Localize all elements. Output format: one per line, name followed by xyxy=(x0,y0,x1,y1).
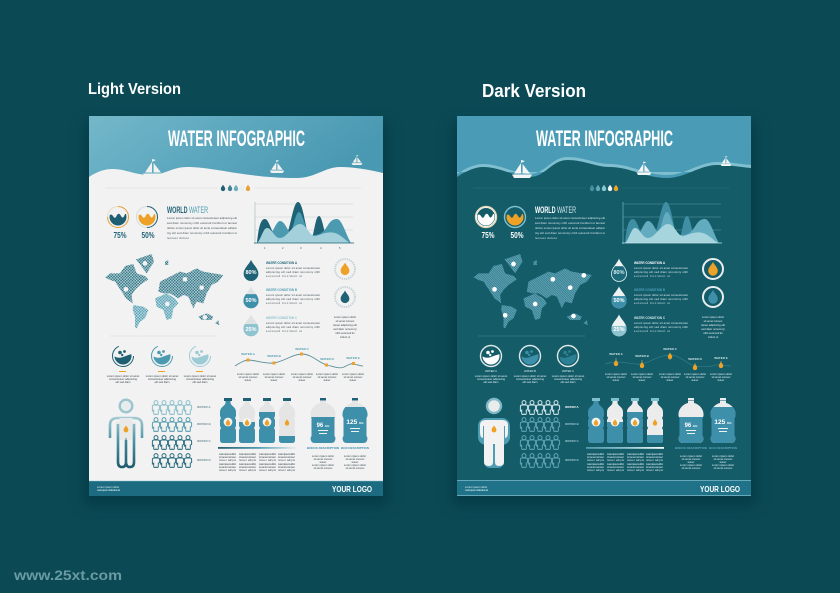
gauge caption: cidunt ut xyxy=(708,335,718,339)
water balls row: consectetuer adipiscing xyxy=(186,377,215,381)
line chart: tetuer xyxy=(271,378,278,382)
bottle notes: tetuer adipis xyxy=(607,458,625,462)
panel: light version poster xyxy=(84,116,388,506)
line chart: tetuer xyxy=(350,378,357,382)
water balls row: elit sed diam xyxy=(560,380,576,384)
bottle notes: sit amet consec xyxy=(627,455,645,459)
text block: world water: sed diam nonummy nibh euismod tincidunt ut laoreet xyxy=(167,221,237,225)
bottle notes xyxy=(219,452,296,472)
water condition C: Lorem ipsum dolor sit amet consectetuer xyxy=(634,321,688,325)
header band with wave xyxy=(457,116,751,200)
percent ring 50 xyxy=(136,206,158,240)
jug captions: tetuer xyxy=(720,460,727,464)
bottle notes: Lorem ipsum dolor xyxy=(239,462,256,466)
bottle notes: Lorem ipsum dolor xyxy=(239,452,256,456)
jug captions: sit amet consec xyxy=(314,466,333,470)
line chart: Lorem ipsum dolor xyxy=(316,372,338,376)
people pictogram rows: WATER D xyxy=(565,458,579,462)
water balls row: elit sed diam xyxy=(192,380,208,384)
line chart: tetuer xyxy=(692,378,699,382)
bottle notes: sit amet consec xyxy=(587,465,605,469)
water condition B: WATER CONDITION B xyxy=(266,287,297,292)
water balls row: Lorem ipsum dolor sit amet xyxy=(514,374,546,378)
percent ring 75: 75% xyxy=(482,231,494,240)
jug captions: Lorem ipsum dolor xyxy=(680,454,702,458)
gallon jug 96 xyxy=(678,398,704,444)
line chart: tetuer xyxy=(613,378,620,382)
water condition C xyxy=(244,315,320,336)
line chart: WATER D xyxy=(320,357,335,361)
jug captions: Lorem ipsum dolor xyxy=(712,454,734,458)
jug captions: Lorem ipsum dolor xyxy=(312,454,334,458)
area chart: 1 xyxy=(264,246,266,250)
jug captions: Lorem ipsum dolor xyxy=(712,463,734,467)
water condition C: 25% xyxy=(613,327,625,333)
gauge caption xyxy=(333,315,357,339)
text block: world water: sed diam nonummy nibh euismod tincidunt ut laoreet xyxy=(535,221,605,225)
bottle notes: Lorem ipsum dolor xyxy=(219,462,236,466)
jug captions: BONUS DESCRIPTION xyxy=(675,446,707,450)
water condition B xyxy=(611,286,688,308)
bottle notes: Lorem ipsum dolor xyxy=(646,462,663,466)
percent ring 50: 50% xyxy=(510,231,524,240)
bottles xyxy=(219,398,296,444)
area chart xyxy=(254,202,354,250)
percent ring 50: 50% xyxy=(142,231,154,240)
bottle notes: sit amet consec xyxy=(219,455,237,459)
text block: world water: dolore Lorem ipsum dolor sit amet consectetuer adipisc xyxy=(535,226,606,230)
line chart: tetuer xyxy=(667,378,674,382)
water condition C: euismod tincidunt ut xyxy=(634,329,670,333)
line chart xyxy=(605,347,732,382)
icon: sailing boats xyxy=(143,155,362,177)
water condition B: WATER CONDITION B xyxy=(634,287,665,292)
world map xyxy=(473,254,592,328)
water balls row xyxy=(475,346,584,384)
people pictogram rows xyxy=(152,401,211,468)
water condition A: 80% xyxy=(245,270,257,276)
water condition C: euismod tincidunt ut xyxy=(266,329,302,333)
bottle notes: sit amet consec xyxy=(259,455,277,459)
bottle notes: sit amet consec xyxy=(607,455,625,459)
water condition A: 80% xyxy=(613,270,625,276)
people pictogram rows: WATER D xyxy=(197,458,211,462)
bottle notes: tetuer adipis xyxy=(239,468,257,472)
area chart: 2 xyxy=(282,246,284,250)
bottle notes: Lorem ipsum dolor xyxy=(607,452,624,456)
text block: world water xyxy=(535,205,606,240)
heading: light version: Light Version xyxy=(88,81,181,98)
water condition A: euismod tincidunt ut xyxy=(266,274,302,278)
people pictogram rows xyxy=(520,401,579,468)
bottle notes: Lorem ipsum dolor xyxy=(587,452,604,456)
jug captions: Lorem ipsum dolor xyxy=(680,463,702,467)
line chart: WATER E xyxy=(346,356,360,360)
bottle notes: sit amet consec xyxy=(278,465,296,469)
gallon jug 125 xyxy=(710,398,736,444)
bottle notes: tetuer adipis xyxy=(239,458,257,462)
water condition C: Lorem ipsum dolor sit amet consectetuer xyxy=(266,321,320,325)
line chart: WATER C xyxy=(663,347,678,351)
bottle notes: sit amet consec xyxy=(278,455,296,459)
jug captions: tetuer xyxy=(352,460,359,464)
text block: world water: Lorem ipsum dolor sit amet consectetuer adipiscing elit xyxy=(535,216,605,220)
water condition C: adipiscing elit sed diam nonummy nibh xyxy=(266,325,320,329)
jug captions: Lorem ipsum dolor xyxy=(344,463,366,467)
text block: world water: ing elit sed diam nonummy nibh euismod tincidunt ut xyxy=(167,231,237,235)
footer: Lorem ipsum dolor xyxy=(465,485,487,489)
watermark: www.25xt.com xyxy=(13,567,122,583)
gauge: orange drop xyxy=(335,259,355,279)
water balls row: consectetuer adipiscing xyxy=(516,377,545,381)
gallon jug 96: 96 KG xyxy=(685,423,698,429)
water condition A xyxy=(244,260,320,281)
line chart: Lorem ipsum dolor xyxy=(237,372,259,376)
line chart: sit amet consec xyxy=(239,375,258,379)
bottle notes: tetuer adipis xyxy=(259,468,277,472)
gauge: teal drop xyxy=(703,287,723,307)
gallon jug 96 xyxy=(310,398,336,444)
bottle notes: tetuer adipis xyxy=(646,468,664,472)
text block: world water: laoreet dolore xyxy=(535,236,558,240)
bottle notes: tetuer adipis xyxy=(607,468,625,472)
gallon jug 125: 125 KG xyxy=(346,419,364,426)
gauge caption: tetuer adipiscing elit xyxy=(701,323,725,327)
water condition A: adipiscing elit sed diam nonummy nibh xyxy=(266,270,320,274)
line chart: sit amet consec xyxy=(661,375,680,379)
line chart: sit amet consec xyxy=(265,375,284,379)
jug captions: sit amet consec xyxy=(346,466,365,470)
area chart: 5 xyxy=(339,246,341,250)
line chart: tetuer xyxy=(245,378,252,382)
line chart: sit amet consec xyxy=(293,375,312,379)
text block: world water: laoreet dolore xyxy=(167,236,190,240)
gallon jug 125: 125 KG xyxy=(714,419,732,426)
footer: YOUR LOGO xyxy=(700,484,740,494)
people pictogram rows: WATER A xyxy=(197,405,211,409)
water balls row: elit sed diam xyxy=(483,380,499,384)
jug captions: Lorem ipsum dolor xyxy=(344,454,366,458)
people pictogram rows: WATER B xyxy=(565,422,579,426)
gauge: orange drop xyxy=(703,259,723,279)
gauge caption: nibh euismod tin xyxy=(703,331,723,335)
water condition A: WATER CONDITION A xyxy=(634,260,665,265)
percent ring 75 xyxy=(108,206,128,240)
water condition B: adipiscing elit sed diam nonummy nibh xyxy=(634,297,688,301)
people pictogram rows: WATER C xyxy=(197,439,211,443)
footer xyxy=(89,481,383,496)
text block: world water: WORLD WATER xyxy=(167,205,208,216)
text block: world water xyxy=(167,205,238,240)
bottle notes: sit amet consec xyxy=(587,455,605,459)
gauge caption: nibh euismod tin xyxy=(335,331,355,335)
water balls row: Lorem ipsum dolor sit amet xyxy=(184,374,216,378)
bottle notes: sit amet consec xyxy=(259,465,277,469)
water balls row: consectetuer adipiscing xyxy=(554,377,583,381)
bottle notes: Lorem ipsum dolor xyxy=(259,452,276,456)
human figure xyxy=(478,399,510,468)
water condition B: adipiscing elit sed diam nonummy nibh xyxy=(266,297,320,301)
bottle progress bar xyxy=(586,447,664,449)
bottle notes: Lorem ipsum dolor xyxy=(219,452,236,456)
water condition C: adipiscing elit sed diam nonummy nibh xyxy=(634,325,688,329)
gauge: teal drop xyxy=(335,287,355,307)
water balls row: elit sed diam xyxy=(154,380,170,384)
water condition B: euismod tincidunt ut xyxy=(266,301,302,305)
bottle notes: sit amet consec xyxy=(219,465,237,469)
water condition B: 50% xyxy=(245,298,257,304)
water balls row: consectetuer adipiscing xyxy=(109,377,138,381)
gauge caption xyxy=(701,315,725,339)
line chart: sit amet consec xyxy=(318,375,337,379)
line chart: Lorem ipsum dolor xyxy=(263,372,285,376)
water condition B: Lorem ipsum dolor sit amet consectetuer xyxy=(634,293,688,297)
line chart: WATER C xyxy=(295,347,310,351)
water balls row: consectetuer adipiscing xyxy=(148,377,177,381)
bottle notes: tetuer adipis xyxy=(278,468,296,472)
percent ring 50 xyxy=(504,206,526,240)
line chart: WATER B xyxy=(635,354,650,358)
water condition A xyxy=(610,259,688,281)
bottle notes: Lorem ipsum dolor xyxy=(259,462,276,466)
water balls row: WATER C xyxy=(562,369,574,373)
jug captions: tetuer xyxy=(320,460,327,464)
bottle notes xyxy=(587,452,664,472)
bottle notes: sit amet consec xyxy=(627,465,645,469)
bottle notes: Lorem ipsum dolor xyxy=(627,462,644,466)
water balls row: elit sed diam xyxy=(115,380,131,384)
jug captions: sit amet consec xyxy=(682,466,701,470)
jug captions: BONUS DESCRIPTION xyxy=(307,446,339,450)
people pictogram rows: WATER B xyxy=(197,422,211,426)
jug captions: tetuer xyxy=(688,460,695,464)
panel: dark version poster xyxy=(452,116,756,506)
bottle notes: sit amet consec xyxy=(239,455,257,459)
gauge caption: sit amet consec xyxy=(704,319,723,323)
bottle notes: tetuer adipis xyxy=(587,458,605,462)
percent ring 75: 75% xyxy=(114,231,126,240)
line chart: Lorem ipsum dolor xyxy=(684,372,706,376)
bottle notes: sit amet consec xyxy=(646,455,664,459)
line chart: Lorem ipsum dolor xyxy=(659,372,681,376)
percent ring 75 xyxy=(476,206,496,240)
area chart xyxy=(622,202,722,244)
divider with drops xyxy=(473,182,729,192)
line chart: Lorem ipsum dolor xyxy=(342,372,364,376)
line chart: WATER A xyxy=(241,352,256,356)
bottle notes: tetuer adipis xyxy=(627,458,645,462)
jug captions: sit amet consec xyxy=(714,466,733,470)
area chart: 3 xyxy=(300,246,302,250)
line chart: WATER E xyxy=(714,356,728,360)
water condition C: WATER CONDITION C xyxy=(634,315,665,320)
water condition B: euismod tincidunt ut xyxy=(634,301,670,305)
heading: dark version: Dark Version xyxy=(482,81,586,101)
water balls row: Lorem ipsum dolor sit amet xyxy=(146,374,178,378)
bottle notes: tetuer adipis xyxy=(219,458,237,462)
bottle notes: tetuer adipis xyxy=(219,468,237,472)
title: WATER INFOGRAPHIC xyxy=(168,126,305,151)
jug captions: BOX DESCRIPTION xyxy=(709,446,737,450)
water condition C: WATER CONDITION C xyxy=(266,315,297,320)
footer: YOUR LOGO xyxy=(332,484,372,494)
water condition A: Lorem ipsum dolor sit amet consectetuer xyxy=(634,266,688,270)
bottle notes: sit amet consec xyxy=(607,465,625,469)
water balls row xyxy=(107,346,216,384)
gallon jug 96: 96 KG xyxy=(317,423,330,429)
bottle progress bar xyxy=(218,447,296,449)
water balls row: Lorem ipsum dolor sit amet xyxy=(552,374,584,378)
gauge caption: sed diam nonummy xyxy=(333,327,357,331)
bottle notes: tetuer adipis xyxy=(627,468,645,472)
bottle notes: Lorem ipsum dolor xyxy=(646,452,663,456)
water balls row: Lorem ipsum dolor sit amet xyxy=(107,374,139,378)
header band with wave xyxy=(89,116,383,178)
gauge caption: tetuer adipiscing elit xyxy=(333,323,357,327)
line chart xyxy=(235,347,364,382)
line chart: sit amet consec xyxy=(712,375,731,379)
water condition A: euismod tincidunt ut xyxy=(634,274,670,278)
water condition B xyxy=(244,287,320,308)
jug captions xyxy=(307,446,369,470)
text block: world water: Lorem ipsum dolor sit amet consectetuer adipiscing elit xyxy=(167,216,237,220)
bottle notes: sit amet consec xyxy=(646,465,664,469)
line chart: Lorem ipsum dolor xyxy=(631,372,653,376)
water balls row: consectetuer adipiscing xyxy=(477,377,506,381)
water condition A: Lorem ipsum dolor sit amet consectetuer xyxy=(266,266,320,270)
line chart: WATER B xyxy=(267,354,282,358)
people pictogram rows: WATER A xyxy=(565,405,579,409)
water condition C: 25% xyxy=(245,327,257,333)
line chart: tetuer xyxy=(299,378,306,382)
bottle notes: Lorem ipsum dolor xyxy=(278,462,295,466)
jug captions: sit amet consec xyxy=(682,457,701,461)
bottle notes: tetuer adipis xyxy=(278,458,296,462)
line chart: Lorem ipsum dolor xyxy=(291,372,313,376)
human figure xyxy=(110,400,142,467)
line chart: tetuer xyxy=(639,378,646,382)
gauge caption: sit amet consec xyxy=(336,319,355,323)
gauge caption: cidunt ut xyxy=(340,335,350,339)
jug captions: sit amet consec xyxy=(346,457,365,461)
bottle notes: sit amet consec xyxy=(239,465,257,469)
bottle notes: tetuer adipis xyxy=(259,458,277,462)
bottle notes: Lorem ipsum dolor xyxy=(587,462,604,466)
title: WATER INFOGRAPHIC xyxy=(536,126,673,151)
water condition A: adipiscing elit sed diam nonummy nibh xyxy=(634,270,688,274)
bottle notes: Lorem ipsum dolor xyxy=(627,452,644,456)
line chart: sit amet consec xyxy=(344,375,363,379)
line chart: sit amet consec xyxy=(607,375,626,379)
area chart: 4 xyxy=(320,246,322,250)
gallon jug 125 xyxy=(342,398,368,444)
jug captions: BOX DESCRIPTION xyxy=(341,446,369,450)
line chart: sit amet consec xyxy=(633,375,652,379)
jug captions xyxy=(675,446,737,470)
text block: world water: ing elit sed diam nonummy nibh euismod tincidunt ut xyxy=(535,231,605,235)
water balls row: Lorem ipsum dolor sit amet xyxy=(475,374,507,378)
gauge caption: sed diam nonummy xyxy=(701,327,725,331)
footer xyxy=(457,480,751,496)
gauge caption: Lorem ipsum dolor xyxy=(702,315,724,319)
footer: Lorem ipsum dolor xyxy=(97,485,119,489)
line chart: WATER D xyxy=(688,357,703,361)
line chart: Lorem ipsum dolor xyxy=(710,372,732,376)
bottle notes: Lorem ipsum dolor xyxy=(607,462,624,466)
water condition B: Lorem ipsum dolor sit amet consectetuer xyxy=(266,293,320,297)
water condition A: WATER CONDITION A xyxy=(266,260,297,265)
jug captions: sit amet consec xyxy=(314,457,333,461)
world map xyxy=(105,254,223,328)
line chart: WATER A xyxy=(609,352,624,356)
footer: Lorem ipsum dolor sit amet xyxy=(97,488,120,492)
text block: world water: WORLD WATER xyxy=(535,205,576,216)
line chart: Lorem ipsum dolor xyxy=(605,372,627,376)
icon: sailing boats xyxy=(512,156,732,178)
water condition B: 50% xyxy=(613,298,625,304)
jug captions: Lorem ipsum dolor xyxy=(312,463,334,467)
text block: world water: dolore Lorem ipsum dolor sit amet consectetuer adipisc xyxy=(167,226,238,230)
water balls row: WATER A xyxy=(485,369,497,373)
water condition C xyxy=(611,314,688,336)
water balls row: elit sed diam xyxy=(522,380,538,384)
line chart: tetuer xyxy=(324,378,331,382)
water balls row: WATER B xyxy=(524,369,536,373)
divider with drops xyxy=(105,182,361,192)
line chart: tetuer xyxy=(718,378,725,382)
footer: Lorem ipsum dolor sit amet xyxy=(465,488,488,492)
line chart: sit amet consec xyxy=(686,375,705,379)
gauge caption: Lorem ipsum dolor xyxy=(334,315,356,319)
bottle notes: tetuer adipis xyxy=(646,458,664,462)
bottle notes: Lorem ipsum dolor xyxy=(278,452,295,456)
jug captions: sit amet consec xyxy=(714,457,733,461)
people pictogram rows: WATER C xyxy=(565,439,579,443)
bottles xyxy=(587,398,664,444)
bottle notes: tetuer adipis xyxy=(587,468,605,472)
